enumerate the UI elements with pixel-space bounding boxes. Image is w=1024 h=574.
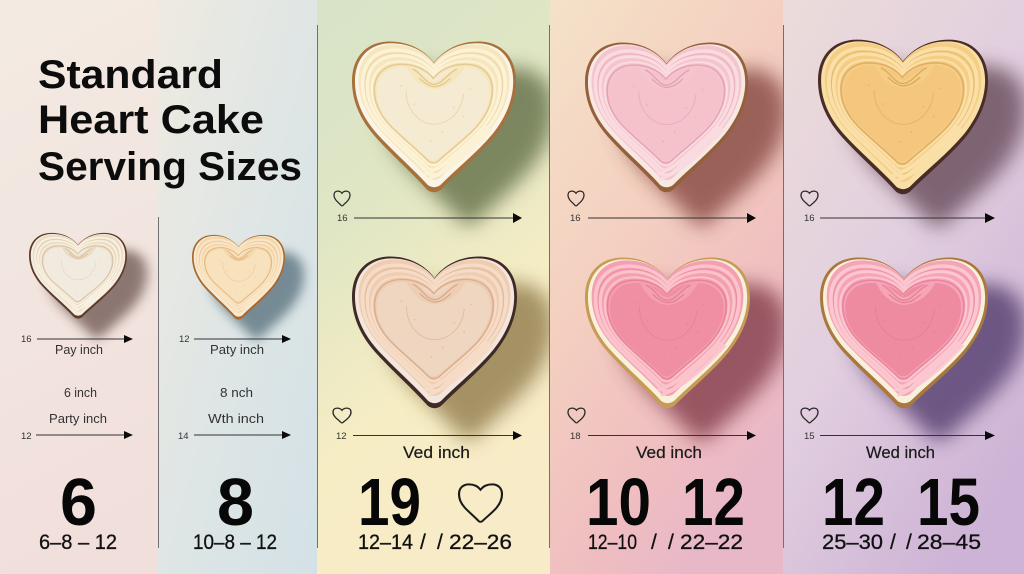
column: 12 and 15 inch measures	[801, 191, 995, 462]
servings: 12-14 and 22-26: /	[420, 531, 426, 554]
cake: small peach heart	[192, 235, 304, 340]
column: 10 inch measures: 12	[336, 431, 347, 442]
column: 10 inch measures: Ved inch	[403, 444, 470, 462]
icon: small heart	[334, 191, 350, 206]
servings: 12-10 and 22-22: 12–10	[588, 531, 637, 554]
column: 12 and 15 inch measures: Wed inch	[866, 444, 935, 462]
numbers: 12 and 15: 12	[822, 465, 885, 540]
column: 8 inch labels: Paty inch	[210, 342, 264, 357]
column: 6 inch labels: Party inch	[49, 411, 107, 426]
cake: large pink heart with cream base	[820, 258, 1024, 441]
column: 6 inch labels: 12	[21, 431, 32, 442]
column: 8 inch labels	[178, 334, 291, 442]
number: 6: 6	[60, 465, 97, 540]
panel: 10 inch column background	[317, 0, 550, 574]
column: 10 inch measures: 16	[337, 213, 348, 224]
servings: 6 inch: 6–8 – 12	[39, 531, 117, 554]
servings: 12-10 and 22-22: 22–22	[680, 531, 743, 554]
column: 12 and 15 inch measures: 15	[804, 431, 815, 442]
title: Heart Cake	[38, 98, 264, 142]
column: 8 inch labels: 12	[179, 334, 190, 345]
column: 10 and 12 inch measures: 16	[570, 213, 581, 224]
number: 8: 8	[217, 465, 254, 540]
numbers: 12 and 15: 15	[917, 465, 980, 540]
panel: 8 inch column background	[158, 0, 317, 574]
number: 19: 19	[358, 465, 421, 540]
servings: 25-30 and 28-45	[822, 531, 981, 554]
icon: large outline heart	[459, 484, 502, 522]
panel: 6 inch column background	[0, 0, 158, 574]
servings: 12-14 and 22-26: /	[437, 531, 443, 554]
title	[38, 53, 302, 189]
servings: 12-10 and 22-22: /	[651, 531, 657, 554]
servings: 25-30 and 28-45: 28–45	[917, 531, 981, 554]
servings: 25-30 and 28-45: /	[890, 531, 896, 554]
cake: large beige heart with chocolate base	[352, 257, 554, 440]
column: 8 inch labels: 14	[178, 431, 189, 442]
cake: large vanilla heart	[352, 42, 554, 225]
servings: 25-30 and 28-45: /	[906, 531, 912, 554]
cake: large pink heart with sponge base	[585, 258, 787, 441]
cake: large pale pink heart	[585, 43, 787, 226]
servings: 8 inch: 10–8 – 12	[193, 531, 277, 554]
panel: 12 and 15 inch column background	[783, 0, 1024, 574]
numbers: 10 and 12	[586, 465, 745, 540]
column: 10 inch measures	[333, 191, 522, 462]
cake: large apricot heart with chocolate base	[818, 40, 1024, 227]
panel: 10 and 12 inch column background	[550, 0, 783, 574]
column: 6 inch labels: 6 inch	[64, 385, 97, 400]
cake: small cream heart with chocolate base	[29, 233, 147, 339]
servings: 12-14 and 22-26	[358, 531, 512, 554]
servings: 12-14 and 22-26: 12–14	[358, 531, 413, 554]
column: 6 inch labels: Pay inch	[55, 342, 103, 357]
numbers: 10 and 12: 12	[682, 465, 745, 540]
title: Standard	[38, 53, 223, 97]
column: 10 and 12 inch measures: Ved inch	[636, 444, 702, 462]
column: 8 inch labels: 8 nch	[220, 385, 253, 400]
column: 10 and 12 inch measures	[568, 191, 756, 462]
column: 8 inch labels: Wth inch	[208, 411, 264, 426]
title: Serving Sizes	[38, 145, 302, 189]
servings: 25-30 and 28-45: 25–30	[822, 531, 883, 554]
numbers: 10 and 12: 10	[586, 465, 651, 540]
servings: 12-10 and 22-22: /	[668, 531, 674, 554]
numbers: 12 and 15	[822, 465, 980, 540]
column: 10 and 12 inch measures: 18	[570, 431, 581, 442]
column: 6 inch labels: 16	[21, 334, 32, 345]
column: 6 inch labels	[21, 334, 133, 442]
servings: 12-10 and 22-22	[588, 531, 743, 554]
servings: 12-14 and 22-26: 22–26	[449, 531, 512, 554]
column: 12 and 15 inch measures: 16	[804, 213, 815, 224]
